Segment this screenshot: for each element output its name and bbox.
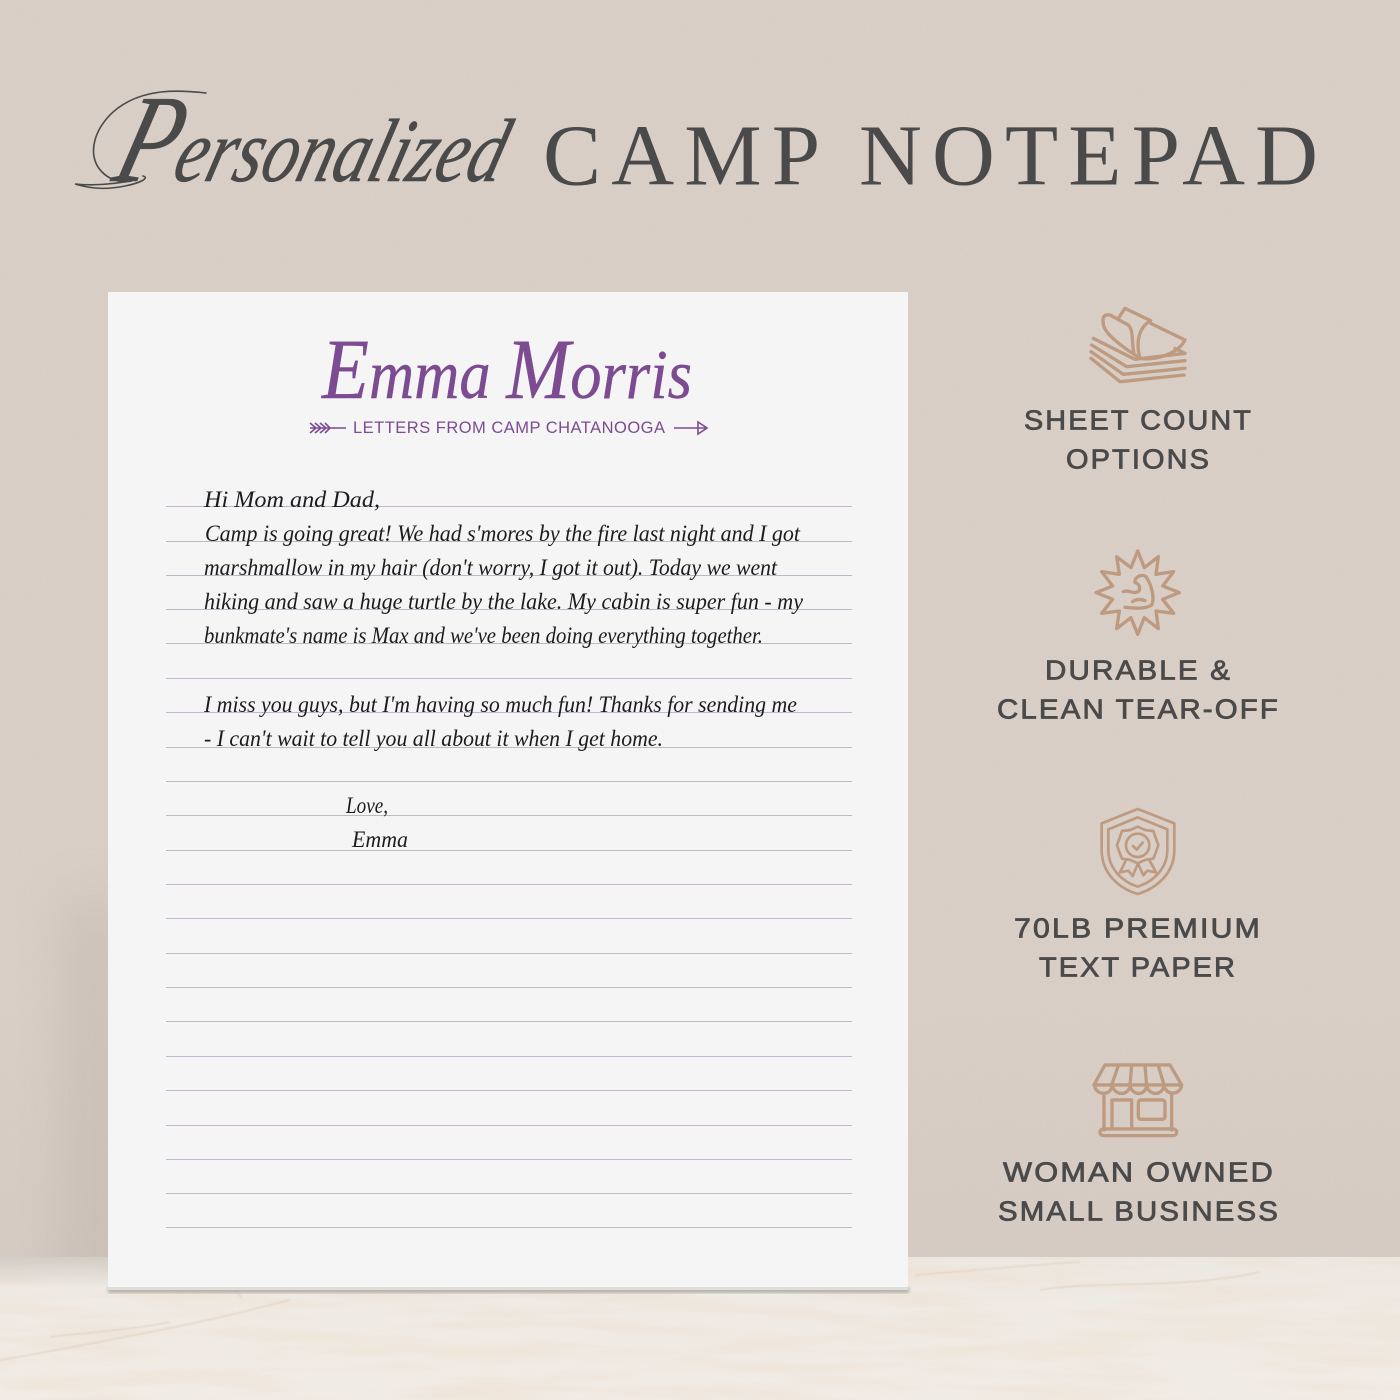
ruled lines bbox=[166, 506, 852, 1228]
handwritten letter: Hi Mom and Dad, bbox=[203, 487, 380, 512]
panel: notepad sheet bbox=[108, 292, 909, 1293]
label: SHEET COUNT bbox=[1024, 404, 1253, 436]
label: 70LB PREMIUM bbox=[1014, 912, 1262, 944]
handwritten letter: - I can't wait to tell you all about it when I get home. bbox=[204, 726, 663, 751]
feature: woman owned small business bbox=[998, 1065, 1280, 1226]
handwritten letter: I miss you guys, but I'm having so much fun! Thanks for sending me bbox=[203, 692, 797, 717]
feature: sheet count options bbox=[1024, 308, 1253, 474]
icon: left arrow bbox=[310, 423, 346, 433]
handwritten letter bbox=[203, 487, 804, 852]
feature: durable and clean tear-off: CLEAN TEAR-OFF bbox=[997, 694, 1280, 724]
handwritten letter: hiking and saw a huge turtle by the lake. My cabin is super fun - my bbox=[204, 589, 804, 614]
subtitle text: LETTERS FROM CAMP CHATANOOGA bbox=[353, 419, 665, 437]
title script word: Personalized: Personalized bbox=[101, 69, 531, 208]
icon: shield with rosette bbox=[1102, 809, 1174, 894]
label: DURABLE & bbox=[1045, 654, 1232, 686]
title bbox=[75, 69, 1318, 208]
notepad subtitle with arrows bbox=[310, 419, 707, 437]
feature: sheet count options: OPTIONS bbox=[1066, 444, 1211, 474]
label: WOMAN OWNED bbox=[1003, 1156, 1275, 1188]
feature: 70lb premium text paper bbox=[1014, 809, 1262, 982]
handwritten letter: Emma bbox=[351, 827, 408, 852]
title caps: CAMP NOTEPAD: CAMP NOTEPAD bbox=[543, 106, 1318, 204]
feature: durable and clean tear-off bbox=[997, 551, 1280, 724]
notepad name: Emma Morris: Emma Morris bbox=[320, 321, 692, 417]
feature: woman owned small business: SMALL BUSINESS bbox=[998, 1196, 1280, 1226]
icon: paper stack bbox=[1091, 308, 1185, 382]
handwritten letter: Love, bbox=[345, 793, 388, 818]
feature: 70lb premium text paper: TEXT PAPER bbox=[1039, 952, 1237, 982]
handwritten letter: marshmallow in my hair (don't worry, I got it out). Today we went bbox=[204, 555, 778, 580]
icon: storefront bbox=[1094, 1065, 1182, 1136]
handwritten letter: Camp is going great! We had s'mores by the fire last night and I got bbox=[205, 521, 801, 546]
marble floor bbox=[0, 1257, 1400, 1400]
icon: right arrow bbox=[674, 422, 707, 434]
wall background bbox=[52, 914, 108, 1257]
handwritten letter: bunkmate's name is Max and we've been doing everything together. bbox=[204, 623, 763, 648]
icon: muscle in burst bbox=[1096, 551, 1179, 634]
